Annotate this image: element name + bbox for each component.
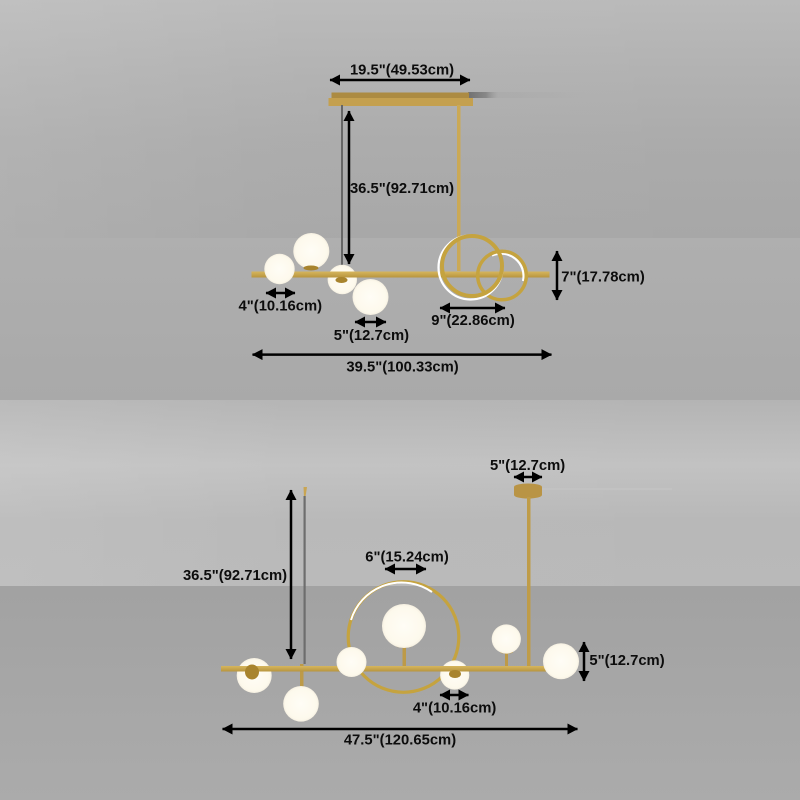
top lamp: double rings bbox=[438, 236, 526, 300]
top lamp: back globes bbox=[293, 233, 357, 294]
dimension labels: 36.5"(92.71cm) bbox=[350, 181, 454, 197]
bottom lamp: ceiling canopy bbox=[514, 484, 672, 498]
dimension labels: 7"(17.78cm) bbox=[561, 270, 645, 286]
dimension labels: 9"(22.86cm) bbox=[431, 313, 515, 329]
dimension labels: 5"(12.7cm) bbox=[490, 458, 565, 474]
bottom lamp: large ring bbox=[348, 582, 459, 692]
bottom lamp: suspension rod bbox=[527, 497, 530, 667]
dimension labels: 19.5"(49.53cm) bbox=[350, 62, 454, 78]
top lamp: suspension rod bbox=[457, 105, 460, 271]
dimension labels: 5"(12.7cm) bbox=[334, 328, 409, 344]
bottom lamp: stems bbox=[300, 644, 513, 688]
bottom lamp: back globes bbox=[237, 658, 469, 693]
panel: top background bbox=[0, 0, 800, 400]
dimension labels: 47.5"(120.65cm) bbox=[344, 732, 456, 748]
dimension labels: 4"(10.16cm) bbox=[239, 299, 322, 315]
dimension arrows bbox=[222, 80, 584, 729]
dimension labels bbox=[183, 62, 665, 748]
bottom lamp: wire with anchor bbox=[304, 487, 307, 664]
panel: bottom background bbox=[0, 400, 800, 800]
top lamp: globes bbox=[264, 254, 388, 315]
dimension labels: 4"(10.16cm) bbox=[413, 701, 496, 717]
top lamp: suspension wire bbox=[341, 105, 343, 272]
bottom lamp: horizontal bar bbox=[221, 666, 546, 672]
bottom lamp: globes bbox=[245, 604, 579, 722]
top lamp: rectangular canopy bbox=[328, 92, 588, 106]
dimension labels: 5"(12.7cm) bbox=[589, 653, 665, 669]
dimension labels: 36.5"(92.71cm) bbox=[183, 568, 287, 584]
dimension labels: 6"(15.24cm) bbox=[365, 550, 449, 566]
top lamp: horizontal bar bbox=[252, 272, 550, 278]
dimension labels: 39.5"(100.33cm) bbox=[346, 359, 459, 375]
